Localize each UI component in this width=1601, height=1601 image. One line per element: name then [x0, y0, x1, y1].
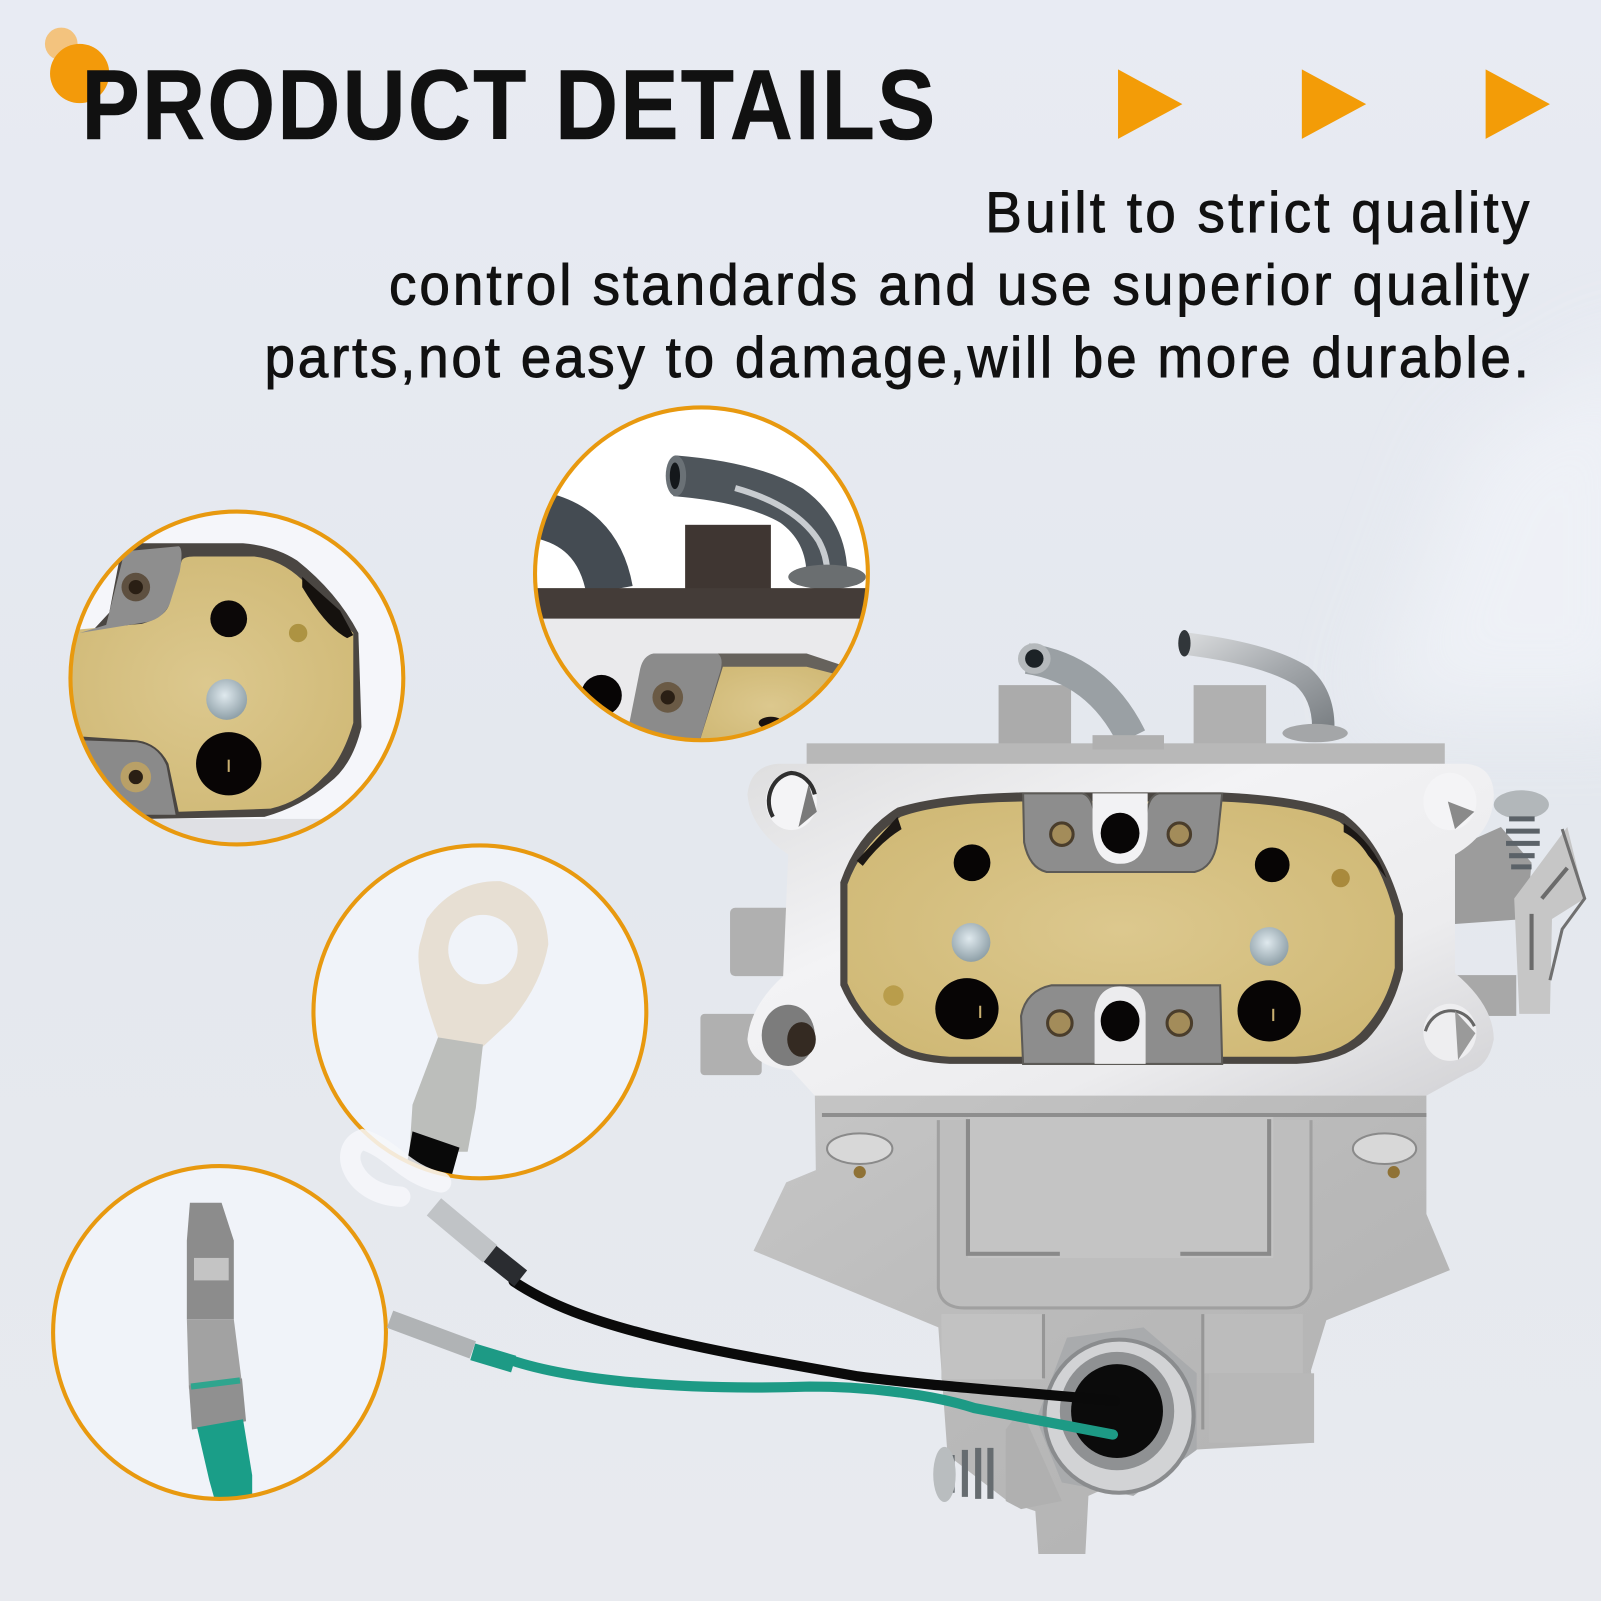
lower spring screw [933, 1409, 1062, 1509]
body bolts [827, 1133, 1416, 1178]
ghost ring terminal [350, 1139, 441, 1197]
wires [350, 1139, 1115, 1435]
right spring bracket [1455, 790, 1585, 1016]
description text [264, 180, 1529, 389]
black terminal [434, 1207, 490, 1254]
arrows [1118, 69, 1550, 139]
gold holes and screws [954, 844, 990, 881]
description text: parts,not easy to damage,will be more durable. [264, 325, 1529, 389]
description text: control standards and use superior quality [389, 252, 1529, 317]
green terminal [390, 1319, 473, 1350]
brass grommets [1048, 823, 1192, 1035]
gold window [840, 792, 1403, 1064]
detail circle: fuel tube close-up [531, 403, 873, 746]
carburetor [700, 630, 1585, 1554]
top centre bracket [1023, 793, 1222, 872]
title: PRODUCT DETAILS [82, 50, 935, 160]
detail circle: gold plate close-up [61, 505, 414, 855]
wire grommet [1036, 1327, 1197, 1496]
body embossing [822, 1115, 1426, 1443]
black wire [514, 1281, 1115, 1401]
detail circle: ring terminal close-up [306, 842, 653, 1184]
detail circle: bullet connector close-up [46, 1159, 393, 1506]
green wire [511, 1360, 1113, 1435]
side ports [700, 908, 791, 1075]
plate holes [762, 773, 1476, 1066]
centre holes [1093, 793, 1148, 864]
decorative orange dots [45, 28, 109, 103]
mounting plate [747, 764, 1494, 1096]
description text: Built to strict quality [985, 180, 1529, 244]
bottom centre bracket [1021, 985, 1222, 1064]
tubes and bosses [807, 630, 1445, 768]
lower body [754, 1093, 1450, 1554]
